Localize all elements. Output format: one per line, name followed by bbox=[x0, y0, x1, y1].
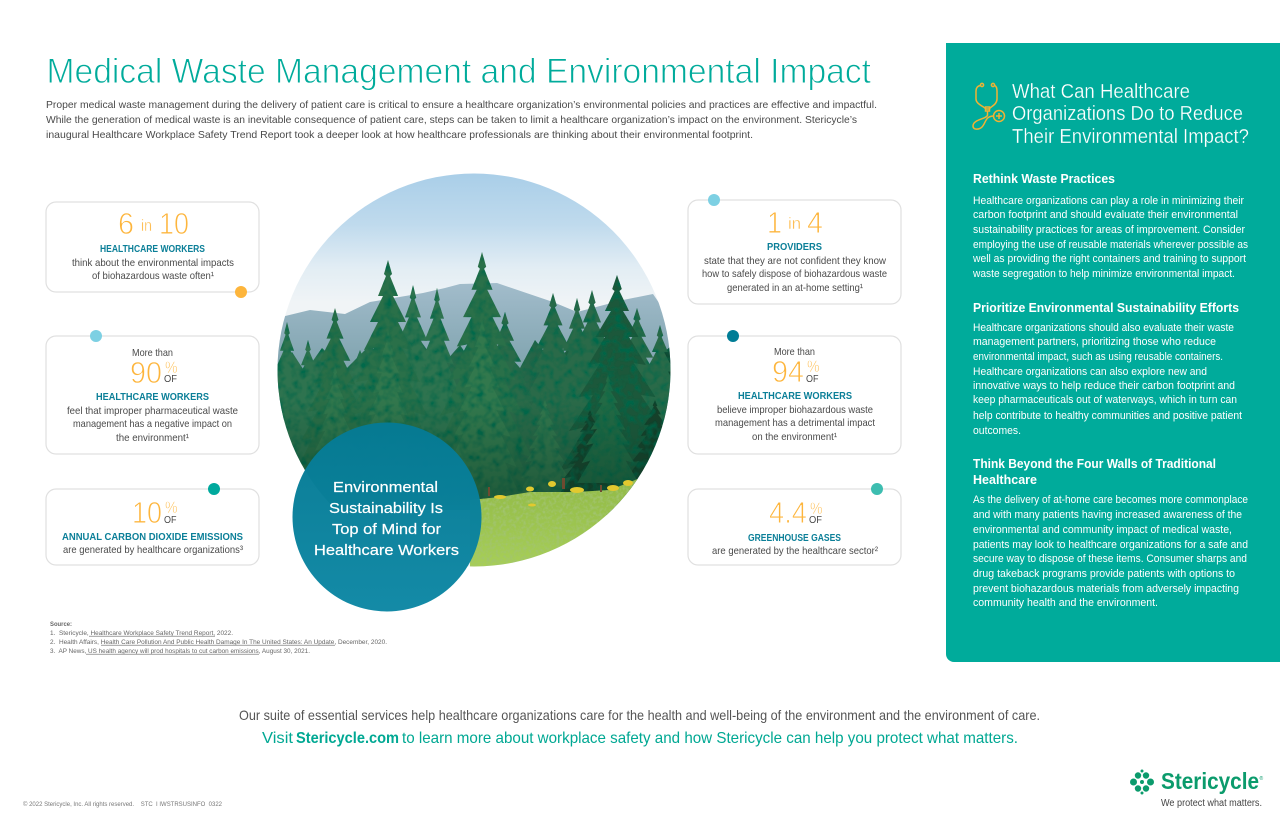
section: think beyond the four walls: patients may look to healthcare organizations for a safe and bbox=[973, 539, 1248, 551]
stat description: feel that improper pharmaceutical waste bbox=[67, 405, 238, 417]
panel: what can healthcare organizations do bbox=[946, 43, 1280, 662]
stat number: OF bbox=[809, 514, 822, 526]
callout circle: environmental sustainability: Sustainability Is bbox=[329, 500, 443, 517]
stat description: on the environment¹ bbox=[752, 431, 837, 443]
icon: stethoscope bbox=[973, 83, 1004, 129]
intro paragraph: Proper medical waste management during the delivery of patient care is critical to ensure a healthcare organization’s environmental policies and practices are effective and impactful. bbox=[46, 99, 877, 111]
stat number: % bbox=[810, 499, 822, 518]
sources: Source: bbox=[50, 622, 72, 628]
section: rethink waste practices: carbon footprint and should evaluate their environmental bbox=[973, 209, 1238, 221]
panel: stat 90% bbox=[46, 330, 259, 454]
copyright: © 2022 Stericycle, Inc. All rights reserved. STC I IWSTRSUSINFO 0322 bbox=[23, 801, 223, 808]
section: think beyond the four walls: drug takeback programs provide patients with options to bbox=[973, 568, 1235, 580]
panel heading: What Can Healthcare bbox=[1012, 81, 1190, 103]
stat number: % bbox=[807, 357, 820, 376]
section: rethink waste practices bbox=[972, 171, 1248, 280]
meadow bbox=[470, 479, 638, 566]
call to action: Visit bbox=[262, 730, 294, 747]
stat label: HEALTHCARE WORKERS bbox=[100, 244, 205, 255]
dot: light blue bbox=[90, 330, 102, 342]
section: think beyond the four walls: As the delivery of at-home care becomes more commonplace bbox=[973, 494, 1248, 506]
stat description bbox=[702, 255, 887, 294]
logo: stericycle bbox=[1130, 768, 1264, 809]
intro paragraph: inaugural Healthcare Workplace Safety Trend Report took a deeper look at how healthcare professionals are thinking about their environmental footprint. bbox=[46, 129, 753, 141]
section: rethink waste practices: employing the use of reusable materials wherever possible as bbox=[973, 239, 1248, 251]
section: think beyond the four walls: Healthcare bbox=[973, 472, 1037, 487]
stat number: OF bbox=[164, 514, 176, 526]
section: prioritize environmental sustainability efforts: outcomes. bbox=[973, 425, 1021, 437]
panel: stat 6 in 10 bbox=[46, 202, 259, 298]
callout circle: environmental sustainability: Top of Mind for bbox=[332, 521, 441, 538]
dot: aqua bbox=[871, 483, 883, 495]
stat description bbox=[72, 257, 234, 282]
section: prioritize environmental sustainability efforts bbox=[973, 300, 1242, 437]
stat description: of biohazardous waste often¹ bbox=[92, 270, 214, 282]
section: prioritize environmental sustainability efforts: Healthcare organizations should also evaluate their waste bbox=[973, 322, 1234, 334]
section: think beyond the four walls: community health and the environment. bbox=[973, 597, 1158, 609]
stat number: 4 bbox=[807, 205, 823, 240]
section: rethink waste practices: well as providing the right containers and training to support bbox=[972, 253, 1246, 265]
intro paragraph bbox=[46, 99, 877, 141]
stat description: think about the environmental impacts bbox=[72, 257, 234, 269]
panel heading bbox=[1012, 81, 1249, 148]
section: prioritize environmental sustainability efforts: help contribute to healthy communities and positive patient bbox=[973, 410, 1242, 422]
stat description: are generated by healthcare organizations³ bbox=[63, 544, 243, 556]
stat description bbox=[67, 405, 238, 444]
stat number: in bbox=[141, 216, 152, 235]
stat number bbox=[118, 206, 189, 241]
stat number: OF bbox=[164, 373, 177, 385]
stat number: 4.4 bbox=[769, 495, 807, 530]
stat description: the environment¹ bbox=[116, 432, 189, 444]
stat description: management has a detrimental impact bbox=[715, 417, 875, 429]
dot: teal bbox=[208, 483, 220, 495]
section: think beyond the four walls: secure way to dispose of these items. Consumer sharps and bbox=[973, 553, 1247, 565]
section: think beyond the four walls: prevent biohazardous materials from adversely impacting bbox=[973, 583, 1239, 595]
stat number: % bbox=[165, 358, 178, 377]
stat description: state that they are not confident they know bbox=[704, 255, 886, 267]
section: prioritize environmental sustainability efforts: Prioritize Environmental Sustainability Efforts bbox=[973, 300, 1239, 315]
dot: dark teal bbox=[727, 330, 739, 342]
section: think beyond the four walls: environmental and community impact of medical waste, bbox=[973, 524, 1232, 536]
sources bbox=[50, 622, 387, 655]
forest photo circle bbox=[278, 174, 670, 566]
stat number bbox=[767, 205, 823, 240]
stat number: 10 bbox=[132, 495, 162, 530]
section: think beyond the four walls: Think Beyond the Four Walls of Traditional bbox=[973, 456, 1216, 471]
section: prioritize environmental sustainability efforts: innovative ways to help reduce their carbon footprint and bbox=[973, 380, 1235, 392]
stat number: 6 bbox=[118, 206, 134, 241]
panel heading: Their Environmental Impact? bbox=[1012, 126, 1249, 148]
stat number: % bbox=[165, 498, 178, 517]
icon: logo mark bbox=[1130, 770, 1154, 794]
dot: orange bbox=[235, 286, 247, 298]
panel: stat 1 in 4 bbox=[688, 194, 901, 304]
panel heading: Organizations Do to Reduce bbox=[1012, 103, 1243, 125]
section: prioritize environmental sustainability efforts: management partners, prioritizing those who reduce bbox=[973, 336, 1216, 348]
stat prefix: More than bbox=[132, 347, 173, 359]
section: rethink waste practices: waste segregation to help minimize environmental impact. bbox=[972, 268, 1235, 280]
stat prefix: More than bbox=[774, 346, 815, 358]
callout circle: environmental sustainability bbox=[292, 422, 482, 612]
stat number: 1 bbox=[767, 205, 782, 240]
stat number: in bbox=[788, 214, 801, 233]
stat description: believe improper biohazardous waste bbox=[717, 404, 873, 416]
panel: stat 10% bbox=[46, 483, 259, 565]
stat description: generated in an at-home setting¹ bbox=[727, 282, 863, 294]
sources: 3. AP News, US health agency will prod hospitals to cut carbon emissions, August 30, 2021. bbox=[50, 649, 310, 655]
callout circle: environmental sustainability: Healthcare Workers bbox=[314, 542, 459, 559]
dot: light blue bbox=[708, 194, 720, 206]
panel: stat 4.4% bbox=[688, 483, 901, 565]
callout circle: environmental sustainability: Environmental bbox=[333, 479, 438, 496]
tagline: We protect what matters. bbox=[1161, 798, 1262, 809]
section: rethink waste practices: Rethink Waste Practices bbox=[973, 171, 1115, 186]
stat description: are generated by the healthcare sector² bbox=[712, 545, 878, 557]
stat description: management has a negative impact on bbox=[73, 418, 232, 430]
stat number: 10 bbox=[159, 206, 189, 241]
registered mark: ® bbox=[1260, 775, 1264, 782]
call to action: to learn more about workplace safety and how Stericycle can help you protect what matters. bbox=[402, 730, 1018, 747]
stat label: HEALTHCARE WORKERS bbox=[738, 391, 852, 402]
footer message: Our suite of essential services help healthcare organizations care for the health and well-being of the environment and the environment of care. bbox=[239, 707, 1040, 723]
section: rethink waste practices: sustainability practices for areas of improvement. Consider bbox=[973, 224, 1245, 236]
stat label: HEALTHCARE WORKERS bbox=[96, 392, 209, 403]
wordmark: Stericycle bbox=[1161, 768, 1259, 794]
section: prioritize environmental sustainability efforts: keep pharmaceuticals out of waterways, which in turn can bbox=[973, 394, 1237, 406]
sources: 1. Stericycle, Healthcare Workplace Safety Trend Report, 2022. bbox=[50, 631, 233, 637]
stat label: ANNUAL CARBON DIOXIDE EMISSIONS bbox=[62, 532, 243, 543]
panel: stat 94% bbox=[688, 330, 901, 454]
stat number: 90 bbox=[130, 355, 162, 390]
stat label: GREENHOUSE GASES bbox=[748, 533, 841, 544]
section: rethink waste practices: Healthcare organizations can play a role in minimizing their bbox=[973, 195, 1244, 207]
call to action: Stericycle.com bbox=[296, 730, 399, 747]
stat label: PROVIDERS bbox=[767, 242, 822, 253]
section: think beyond the four walls: and with many patients having increased awareness of the bbox=[973, 509, 1242, 521]
sources: 2. Health Affairs, Health Care Pollution And Public Health Damage In The United States: An Update, December, 2020. bbox=[50, 640, 387, 646]
stat number: OF bbox=[806, 373, 818, 385]
section: think beyond the four walls bbox=[973, 456, 1248, 609]
section: prioritize environmental sustainability efforts: Healthcare organizations can also explore new and bbox=[973, 366, 1207, 378]
intro paragraph: While the generation of medical waste is an inevitable consequence of patient care, steps can be taken to limit a healthcare organization’s impact on the environment. Stericycle’s bbox=[46, 114, 857, 126]
stat description: how to safely dispose of biohazardous waste bbox=[702, 268, 887, 280]
stat number: 94 bbox=[772, 354, 804, 389]
title: Medical Waste Management and Environmental Impact bbox=[46, 51, 871, 91]
stat description bbox=[715, 404, 875, 443]
section: prioritize environmental sustainability efforts: environmental impact, such as using reusable containers. bbox=[973, 351, 1223, 363]
